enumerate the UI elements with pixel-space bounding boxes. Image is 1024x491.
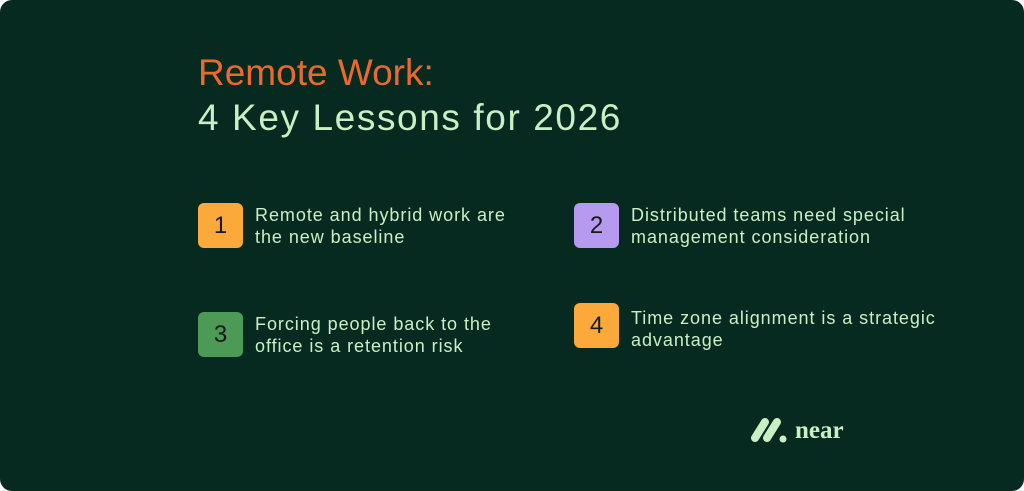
badge 4: [574, 303, 619, 348]
text 4: advantage: [631, 330, 724, 350]
item 1: [198, 203, 506, 248]
text 4: [631, 308, 936, 350]
badge 2: 2: [590, 212, 603, 238]
item 4: [574, 303, 936, 350]
logo mark: [751, 418, 786, 442]
badge 2: [574, 203, 619, 248]
badge 1: 1: [214, 212, 227, 238]
text 3: [255, 314, 492, 356]
badge 3: 3: [214, 320, 227, 348]
logo text: near: [795, 417, 844, 444]
logo: near: [751, 417, 844, 444]
text 4: Time zone alignment is a strategic: [631, 308, 936, 328]
text 2: management consideration: [631, 227, 871, 247]
text 3: office is a retention risk: [255, 336, 463, 356]
item 2: [574, 203, 906, 248]
title line 2: 4 Key Lessons for 2026: [198, 97, 622, 138]
badge 3: [198, 312, 243, 357]
text 1: the new baseline: [255, 227, 405, 247]
text 2: Distributed teams need special: [631, 205, 906, 225]
badge 1: [198, 203, 243, 248]
badge 4: 4: [590, 312, 603, 338]
text 1: [255, 205, 506, 247]
text 3: Forcing people back to the: [255, 314, 492, 334]
text 2: [631, 205, 906, 247]
title line 1: Remote Work:: [198, 52, 434, 93]
text 1: Remote and hybrid work are: [255, 205, 506, 225]
item 3: [198, 312, 492, 357]
